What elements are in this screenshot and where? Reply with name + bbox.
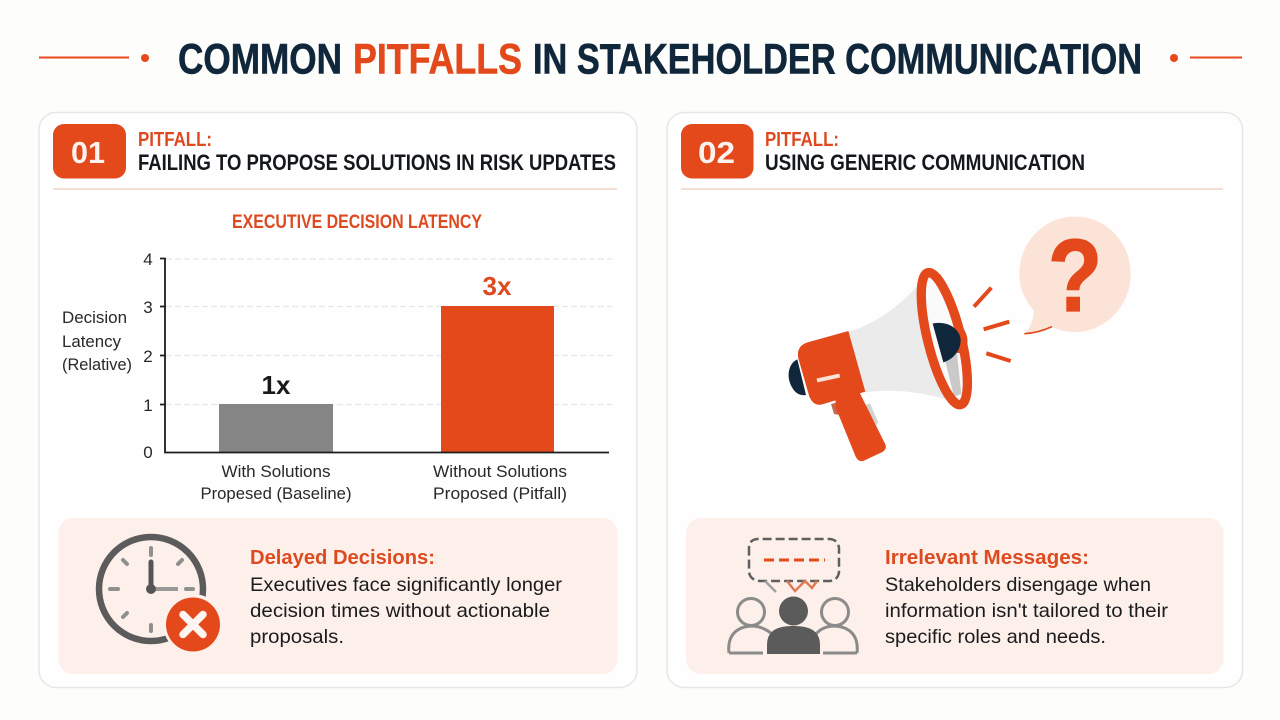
- heading: pitfall 02: [765, 128, 1085, 175]
- axis tick labels: 1: [143, 396, 153, 415]
- handle trigger: [863, 403, 878, 427]
- panel: pitfall 02: [667, 112, 1242, 688]
- person: center: [779, 596, 808, 626]
- axis tick labels: 3: [143, 298, 153, 317]
- y axis label: (Relative): [62, 355, 132, 374]
- heading: pitfall 02: PITFALL:: [765, 128, 839, 151]
- category label: with solutions: [200, 462, 352, 503]
- icon: clock with x: [99, 537, 223, 654]
- cone: [848, 283, 950, 401]
- speech bubble: [1019, 217, 1131, 334]
- bar: with solutions: [219, 404, 333, 453]
- icon: megaphone with question bubble: [789, 217, 1131, 461]
- callout text: Delayed Decisions:: [250, 546, 435, 569]
- category label: without solutions: [433, 462, 567, 503]
- callout text: [885, 546, 1169, 648]
- handle shadow: [831, 402, 840, 415]
- body: [798, 331, 865, 405]
- value label: 3x: 3x: [483, 271, 512, 301]
- heading: pitfall 01: FAILING TO PROPOSE SOLUTIONS IN RISK UPDATES: [138, 150, 616, 175]
- callout: irrelevant messages: [686, 518, 1224, 674]
- person: left: [738, 598, 764, 626]
- callout text: information isn't tailored to their: [885, 600, 1169, 622]
- icon: people with dashed speech bubble: [729, 539, 857, 654]
- ring bump: [956, 323, 968, 353]
- axis tick labels: 4: [143, 250, 153, 269]
- y axis label: Latency: [62, 332, 121, 351]
- callout text: Executives face significantly longer: [250, 574, 563, 596]
- title: COMMON: [178, 36, 342, 84]
- callout text: Stakeholders disengage when: [885, 574, 1151, 596]
- category label: without solutions: Without Solutions: [433, 462, 567, 481]
- ring: [912, 269, 977, 409]
- axis tick labels: [143, 250, 153, 462]
- question mark: ?: [1048, 219, 1102, 334]
- callout: delayed decisions: [58, 518, 618, 674]
- value label: 1x: 1x: [262, 370, 291, 400]
- callout text: Irrelevant Messages:: [885, 546, 1089, 569]
- title: [39, 36, 1242, 84]
- badge: 02: [681, 124, 754, 178]
- bar: without solutions: [441, 306, 554, 453]
- sound lines: [974, 288, 1011, 361]
- panel: pitfall 01: [39, 112, 637, 688]
- badge: 02: 02: [698, 135, 735, 170]
- y axis label: [62, 308, 132, 374]
- heading: pitfall 01: PITFALL:: [138, 128, 212, 151]
- callout text: proposals.: [250, 626, 344, 648]
- category label: with solutions: Propesed (Baseline): [200, 484, 352, 503]
- title: PITFALLS: [353, 36, 522, 84]
- badge: 01: [53, 124, 126, 178]
- callout text: [250, 546, 563, 648]
- callout text: specific roles and needs.: [885, 626, 1106, 648]
- category label: without solutions: Proposed (Pitfall): [433, 484, 567, 503]
- axis tick labels: 0: [143, 443, 153, 462]
- rear cap: [789, 359, 806, 395]
- chart title: EXECUTIVE DECISION LATENCY: [232, 211, 482, 233]
- title: IN STAKEHOLDER COMMUNICATION: [533, 36, 1142, 84]
- bar chart: executive decision latency: [62, 250, 612, 503]
- mouth: [912, 268, 977, 409]
- y axis label: Decision: [62, 308, 127, 327]
- category label: with solutions: With Solutions: [222, 462, 330, 481]
- speaker: [933, 323, 961, 362]
- badge: 01: 01: [71, 135, 105, 170]
- handle: [835, 390, 886, 461]
- person: right: [822, 598, 848, 626]
- heading: pitfall 02: USING GENERIC COMMUNICATION: [765, 150, 1085, 175]
- heading: pitfall 01: [138, 128, 616, 175]
- axis tick labels: 2: [143, 347, 153, 366]
- callout text: decision times without actionable: [250, 600, 550, 622]
